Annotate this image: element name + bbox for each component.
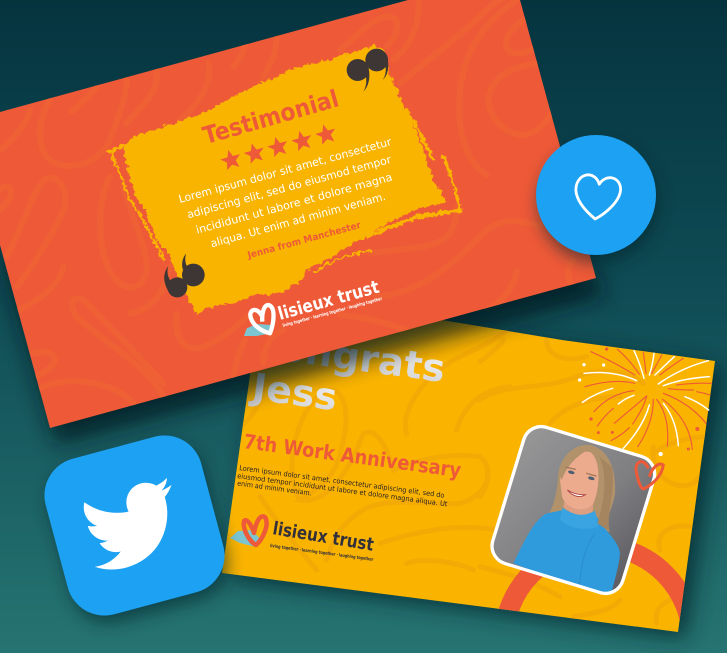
icon: blue circle with heart — [536, 135, 658, 263]
logo: lisieux trust white: lisieux trust — [276, 277, 382, 325]
icon: small orange heart — [636, 462, 663, 489]
fireworks — [578, 347, 712, 456]
logo: lisieux trust white — [244, 277, 383, 336]
text: testimonial quote: aliqua. Ut enim ad minim veniam. — [209, 190, 387, 250]
text: testimonial quote: incididunt ut labore et dolore magna — [194, 171, 394, 237]
shadow of testimonial card — [6, 20, 606, 445]
decorative arch — [498, 543, 685, 620]
icon: opening and closing quote marks — [164, 49, 388, 297]
text: testimonial quote: Lorem ipsum dolor sit amet, consectetur — [177, 135, 393, 206]
logo: lisieux trust white: living together · learning together · laughing together — [282, 296, 383, 329]
heading: Testimonial: Testimonial — [200, 85, 342, 150]
photo: smiling woman in blue turtleneck — [490, 424, 665, 596]
logo: lisieux trust dark — [230, 516, 376, 563]
star rating — [218, 122, 338, 171]
heading: Jess: Jess — [247, 365, 340, 419]
heading: Congrats: Congrats — [249, 321, 448, 391]
heading: 7th Work Anniversary: 7th Work Anniversary — [242, 429, 463, 482]
logo: lisieux trust dark: lisieux trust — [271, 518, 376, 556]
brush panel — [110, 45, 461, 315]
text: testimonial quote — [177, 135, 394, 250]
panel: testimonial card — [0, 0, 596, 428]
text: anniversary body: enim ad minim veniam. — [237, 480, 312, 498]
logo: lisieux trust dark: living together · learning together · laughing together — [270, 543, 374, 563]
text: anniversary body: Lorem ipsum dolor sit amet, consectetur adipiscing elit, sed do — [239, 464, 445, 500]
icon: twitter tile — [36, 427, 237, 632]
text: testimonial quote: adipiscing elit, sed do eiusmod tempor — [186, 153, 393, 221]
panel: congrats card — [220, 290, 723, 640]
text: attribution: Jenna from Manchester — [246, 220, 363, 262]
text: anniversary body: eiusmod tempor incididunt ut labore et dolore magna aliqua. Ut — [237, 472, 448, 508]
